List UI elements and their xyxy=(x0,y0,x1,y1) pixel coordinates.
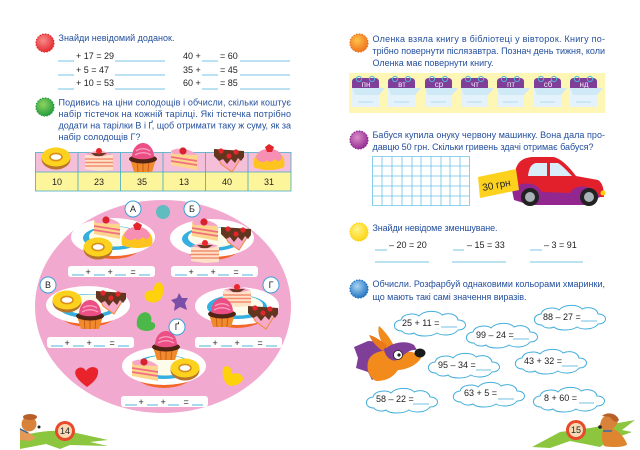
cloud: 63 + 5 xyxy=(453,382,524,407)
plate Ґ xyxy=(122,331,206,388)
price tag: 30 грн xyxy=(481,178,512,194)
text block: task 4: давцю 50 грн. Скільки гривень здачі отримає бабуся? xyxy=(372,142,594,152)
equations: task 1 xyxy=(58,51,290,89)
price table: 23 xyxy=(94,177,104,187)
weekday band xyxy=(349,73,605,113)
plate Б xyxy=(170,218,254,263)
text block: task 2: набір тістечок на кожній тарілці. Які тістечка потрібно xyxy=(58,109,291,119)
cloud: 25 + 11 xyxy=(394,311,466,336)
equations: task 1: = 85 xyxy=(220,78,238,88)
cloud: 43 + 32: 43 + 32 = xyxy=(524,356,562,366)
weekday band: пн xyxy=(362,80,370,89)
text block: task 2: набір солодощів Г? xyxy=(58,132,140,142)
text block: task 2: Подивись на ціни солодощів і обчисли, скільки коштує xyxy=(58,98,291,108)
page number 15 xyxy=(566,420,586,440)
bullet: purple xyxy=(350,131,368,149)
answer strips: ++= xyxy=(212,338,263,348)
price table: 31 xyxy=(264,177,274,187)
bullet: blue xyxy=(350,280,368,298)
cloud: 25 + 11: 25 + 11 = xyxy=(402,318,439,328)
text block: task 3: Оленка взяла книгу в бібліотеці у вівторок. Книгу по- xyxy=(372,34,605,44)
text block: task 4 xyxy=(372,130,605,152)
plate letters xyxy=(40,201,279,335)
pink oval panel with plates: Б xyxy=(189,204,195,214)
bullet: red xyxy=(36,34,54,52)
equations: task 5: – 3 = 91 xyxy=(544,240,577,250)
weekday band: вт xyxy=(398,80,406,89)
weekday band: ср xyxy=(435,80,444,89)
cloud: 8 + 60: 8 + 60 = xyxy=(544,393,577,403)
plate Г xyxy=(195,284,279,329)
weekday band: чт xyxy=(471,80,479,89)
text block: task 2: додати на тарілки В і Ґ, щоб отримати таку ж суму, як за xyxy=(58,120,291,130)
price table xyxy=(36,143,291,191)
pink oval panel with plates xyxy=(35,200,291,413)
bullet: yellow xyxy=(350,223,368,241)
cloud: 88 – 27: 88 – 27 = xyxy=(543,312,581,322)
page number 15: 15 xyxy=(571,425,581,435)
equations: task 1: = 45 xyxy=(220,65,238,75)
weekday band: сб xyxy=(544,80,553,89)
heading: task 5: Знайди невідоме зменшуване. xyxy=(372,223,498,233)
decorations: candies xyxy=(75,205,243,387)
pink oval panel with plates: Ґ xyxy=(175,321,180,332)
equations: task 1: 40 + xyxy=(183,51,201,61)
cloud: 58 – 22 xyxy=(366,388,438,413)
cloud: 99 – 24 xyxy=(466,323,538,348)
footer right: grass and dog xyxy=(532,413,635,448)
weekday band: нд xyxy=(579,80,589,89)
price table: 35 xyxy=(137,177,147,187)
answer strips: ++= xyxy=(138,397,189,407)
price tag xyxy=(478,169,519,198)
equations: task 1: 60 + xyxy=(183,78,201,88)
answer strips: ++= xyxy=(86,267,136,277)
plate В xyxy=(46,286,130,329)
car xyxy=(512,157,606,206)
text block: task 3 xyxy=(372,34,605,68)
answer strips xyxy=(47,266,282,407)
pink oval panel with plates: Г xyxy=(269,280,274,290)
cloud: 63 + 5: 63 + 5 = xyxy=(464,388,497,398)
cloud: 95 – 34: 95 – 34 = xyxy=(438,360,476,370)
page number 14: 14 xyxy=(60,426,70,436)
text block: task 4: Бабуся купила онуку червону машинку. Вона дала про- xyxy=(372,130,605,140)
plate А xyxy=(71,216,155,260)
answer strips: ++= xyxy=(64,338,115,348)
text block: task 6 xyxy=(372,279,605,302)
answer grid xyxy=(372,156,470,206)
equations: task 5 xyxy=(375,240,583,262)
pink oval panel with plates: А xyxy=(130,204,136,214)
price table: 10 xyxy=(52,177,62,187)
bullet: orange xyxy=(350,34,368,52)
footer left: grass and dog xyxy=(20,414,108,449)
equations: task 1: + 17 = 29 xyxy=(76,51,114,61)
cloud: 99 – 24: 99 – 24 = xyxy=(476,330,514,340)
text block: task 6: що мають такі самі значення виразів. xyxy=(372,292,526,302)
equations: task 5: – 15 = 33 xyxy=(467,240,505,250)
page number 14 xyxy=(55,421,75,441)
text block: task 3: трібно повернути післязавтра. Познач день тижня, коли xyxy=(372,46,605,56)
fox in cape xyxy=(354,326,426,381)
cloud: 43 + 32 xyxy=(515,349,586,374)
cloud: 8 + 60 xyxy=(533,387,604,412)
cloud: 95 – 34 xyxy=(428,353,500,378)
text block: task 6: Обчисли. Розфарбуй однаковими кольорами хмаринки, xyxy=(372,279,605,289)
weekday band: пт xyxy=(507,80,515,89)
equations: task 1: = 60 xyxy=(220,51,238,61)
pink oval panel with plates: В xyxy=(45,280,51,290)
cloud: 88 – 27 xyxy=(534,305,606,330)
equations: task 1: + 5 = 47 xyxy=(76,65,109,75)
bullet: green xyxy=(36,98,54,116)
equations: task 1: 35 + xyxy=(183,65,201,75)
equations: task 5: – 20 = 20 xyxy=(389,240,427,250)
equations: task 1: + 10 = 53 xyxy=(76,78,114,88)
price table: 13 xyxy=(179,177,189,187)
cloud: 58 – 22: 58 – 22 = xyxy=(376,394,414,404)
text block: task 2 xyxy=(58,98,291,142)
heading: task 1: Знайди невідомий доданок. xyxy=(58,33,174,43)
answer strips: ++= xyxy=(188,267,239,277)
price table: 40 xyxy=(222,177,232,187)
text block: task 3: Оленка має повернути книгу. xyxy=(372,58,494,68)
